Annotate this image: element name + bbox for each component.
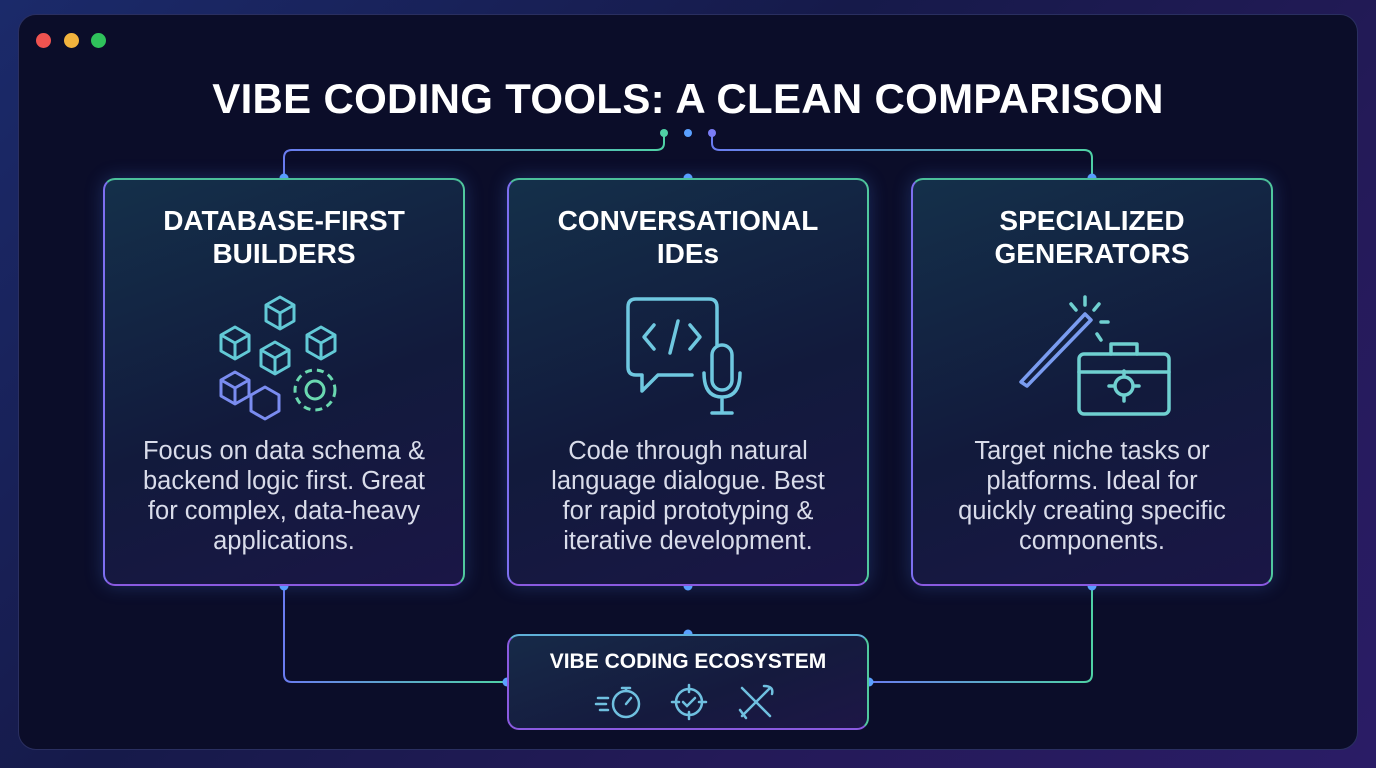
heading: IDEs [657,238,719,269]
heading: CONVERSATIONAL [558,205,818,236]
panel: conversational IDEs [507,178,869,586]
panel: vibe coding ecosystem [507,634,869,730]
description: backend logic first. Great [143,467,425,495]
panel: database-first builders [103,178,465,586]
description: iterative development. [563,527,813,555]
icon: chat code and mic [626,297,742,415]
description: Focus on data schema & [143,437,425,465]
heading: GENERATORS [994,238,1190,269]
description: for complex, data-heavy [148,497,420,525]
heading [163,205,405,269]
description: applications. [213,527,355,555]
description: language dialogue. Best [551,467,825,495]
description: Code through natural [568,437,808,465]
heading [994,205,1190,269]
description [958,437,1226,555]
description [551,437,825,555]
icon: wand and toolbox [1019,295,1171,416]
heading: SPECIALIZED [999,205,1185,236]
title: VIBE CODING TOOLS: A CLEAN COMPARISON [212,75,1164,122]
description: components. [1019,527,1165,555]
heading [558,205,818,269]
description: platforms. Ideal for [986,467,1198,495]
icons: stopwatch, target check, tools [594,684,774,720]
heading: BUILDERS [212,238,356,269]
window dots [36,33,106,48]
description: Target niche tasks or [974,437,1210,465]
heading: VIBE CODING ECOSYSTEM [550,650,826,673]
description: for rapid prototyping & [563,497,813,525]
description [143,437,425,555]
heading: DATABASE-FIRST [163,205,405,236]
icon: cubes and gear [220,296,336,420]
panel: specialized generators [911,178,1273,586]
description: quickly creating specific [958,497,1226,525]
